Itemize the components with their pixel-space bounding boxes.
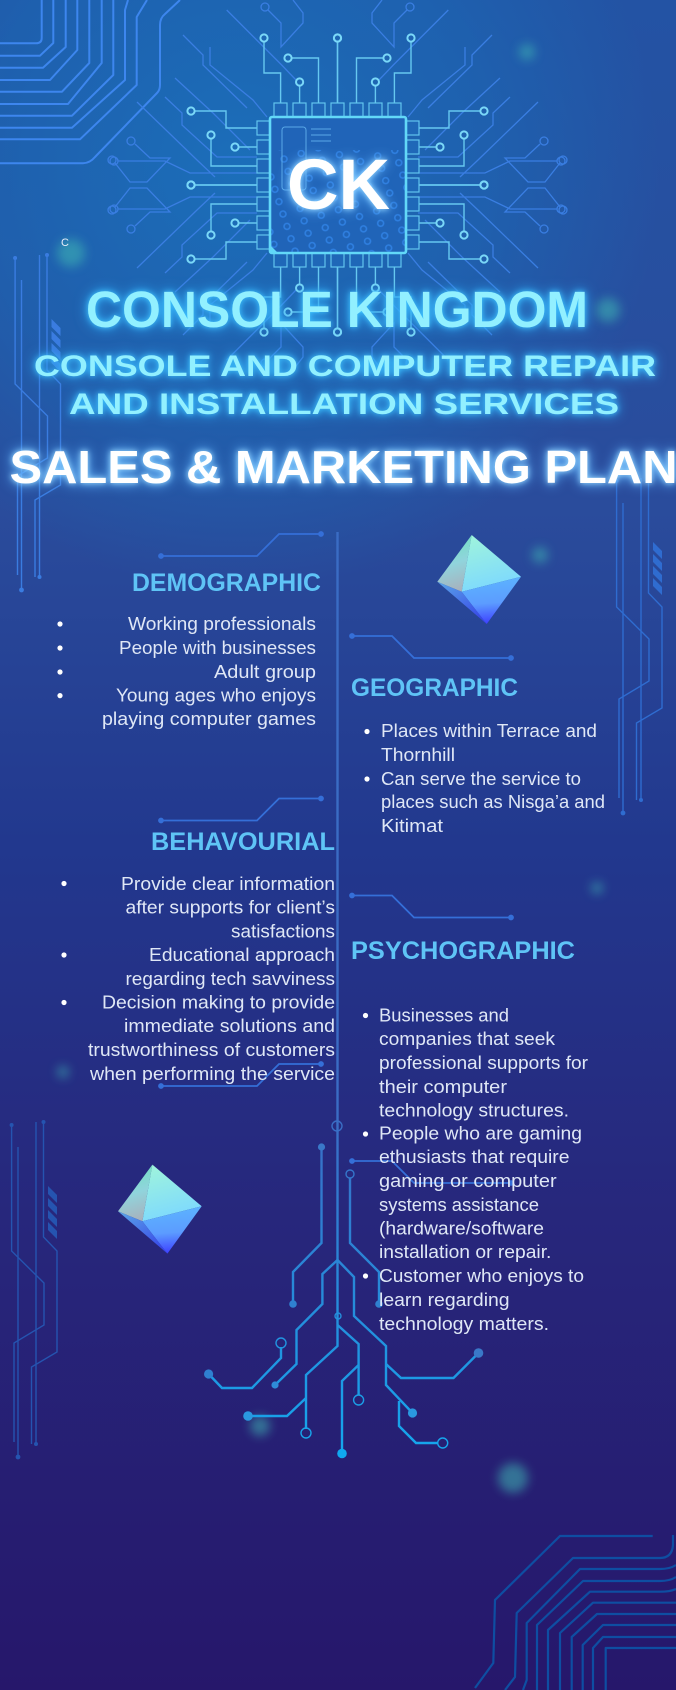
behavourial list: after supports for client’s [126, 898, 335, 918]
demographic list: Young ages who enjoys [116, 686, 316, 706]
psychographic list: (hardware/software [379, 1219, 544, 1239]
geographic list [364, 721, 605, 836]
circuit: left upper side [13, 253, 61, 592]
behavourial list: immediate solutions and [124, 1016, 335, 1036]
geographic list: Places within Terrace and [381, 721, 597, 741]
psychographic list: gaming or computer [379, 1171, 557, 1191]
subtitle line 2: AND INSTALLATION SERVICES [69, 388, 619, 421]
panel: behavourial [61, 828, 335, 1084]
psychographic list: Businesses and [379, 1006, 509, 1026]
psychographic list: companies that seek [379, 1029, 556, 1049]
psychographic list: professional supports for [379, 1053, 588, 1073]
panel: demographic [57, 569, 321, 729]
circuit: top left corner [0, 0, 180, 163]
geographic list: Thornhill [381, 745, 455, 765]
psychographic list [363, 1006, 588, 1334]
geographic list: Can serve the service to [381, 769, 581, 789]
microchip illustration [108, 0, 567, 370]
icon: diamond top right [437, 535, 521, 624]
circuit: left lower side [10, 1120, 57, 1459]
circuit: bottom right corner [475, 1535, 676, 1690]
psychographic list: Customer who enjoys to [379, 1266, 584, 1286]
psychographic list: installation or repair. [379, 1242, 551, 1262]
icon: diamond bottom left [118, 1165, 202, 1254]
behavourial list [61, 874, 335, 1084]
connector lines [159, 532, 513, 1185]
geographic heading: GEOGRAPHIC [351, 674, 518, 702]
behavourial list: regarding tech savviness [126, 969, 335, 989]
behavourial list: trustworthiness of customers [88, 1040, 335, 1060]
psychographic list: People who are gaming [379, 1124, 582, 1144]
psychographic list: systems assistance [379, 1195, 539, 1215]
heading: Sales and Marketing Plan: SALES & MARKETING PLAN [10, 441, 676, 493]
logo: CK: CK [287, 146, 390, 225]
stray letter: C [61, 237, 69, 249]
behavourial list: satisfactions [231, 921, 335, 941]
glowing spots [57, 44, 620, 1493]
demographic list: People with businesses [119, 638, 316, 658]
psychographic list: technology matters. [379, 1314, 549, 1334]
centre timeline and circuit tree [204, 532, 483, 1458]
psychographic list: learn regarding [379, 1290, 510, 1310]
geographic list: places such as Nisga’a and [381, 792, 605, 812]
demographic list: playing computer games [102, 709, 316, 729]
psychographic list: ethusiasts that require [379, 1147, 570, 1167]
panel: psychographic [351, 937, 588, 1334]
behavourial list: when performing the service [89, 1064, 335, 1084]
demographic list [57, 614, 316, 729]
psychographic heading: PSYCHOGRAPHIC [351, 937, 575, 965]
title: Console Kingdom: CONSOLE KINGDOM [86, 281, 588, 338]
demographic list: Working professionals [128, 614, 316, 634]
psychographic list: technology structures. [379, 1100, 569, 1120]
demographic list: Adult group [214, 662, 316, 682]
panel: geographic [351, 674, 605, 836]
demographic heading: DEMOGRAPHIC [132, 569, 321, 597]
geographic list: Kitimat [381, 816, 443, 836]
behavourial heading: BEHAVOURIAL [151, 828, 335, 856]
circuit: right side [615, 476, 662, 815]
subtitle line 1: CONSOLE AND COMPUTER REPAIR [34, 350, 656, 383]
behavourial list: Provide clear information [121, 874, 335, 894]
psychographic list: their computer [379, 1077, 507, 1097]
behavourial list: Decision making to provide [102, 993, 335, 1013]
behavourial list: Educational approach [149, 945, 335, 965]
